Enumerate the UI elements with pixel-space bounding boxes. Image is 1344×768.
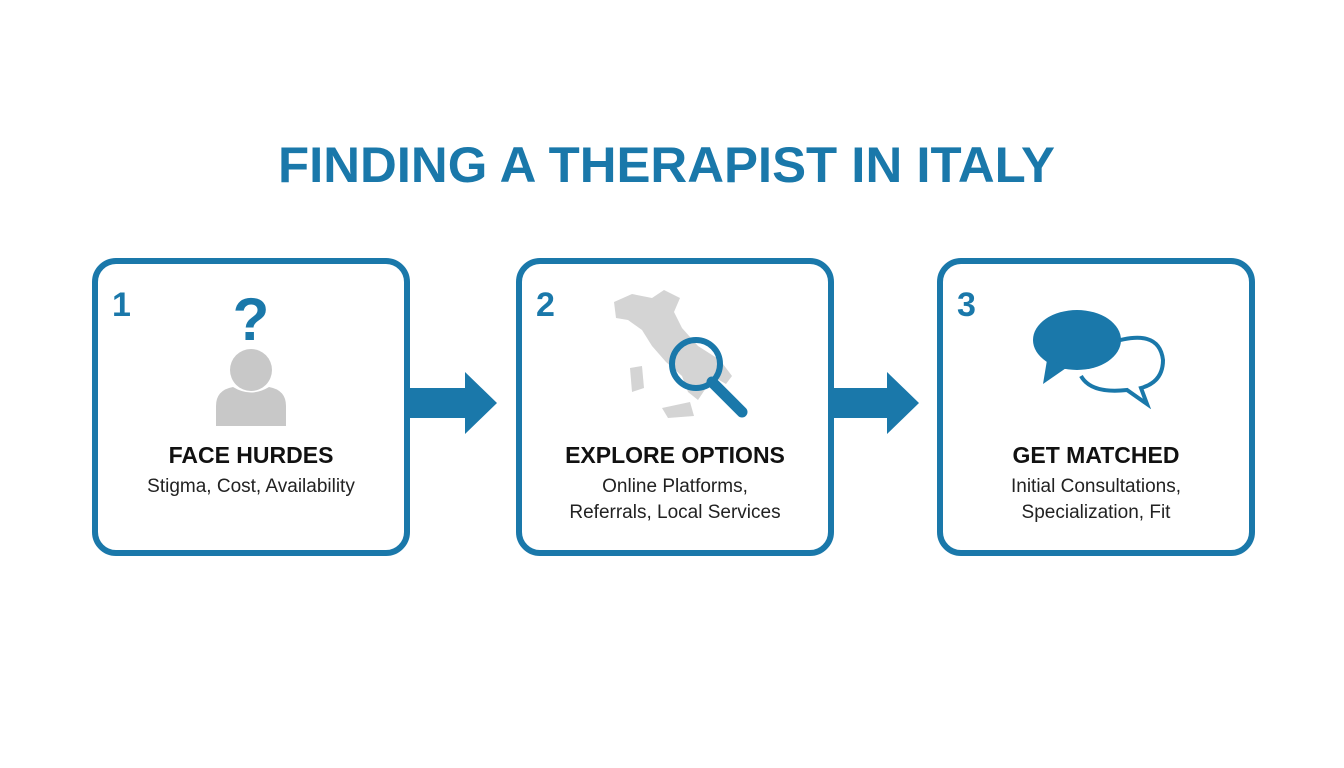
description: Specialization, Fit	[1022, 502, 1170, 523]
heading: GET MATCHED	[1013, 442, 1179, 468]
arrow 2	[834, 372, 919, 434]
panel: step 2	[516, 258, 834, 556]
heading: EXPLORE OPTIONS	[565, 442, 785, 468]
step number 3: 3	[957, 286, 976, 324]
panel: step 1	[92, 258, 410, 556]
description: Referrals, Local Services	[569, 502, 781, 523]
heading: FACE HURDES	[169, 442, 333, 468]
icon: speech bubbles	[1033, 310, 1165, 409]
description: Initial Consultations,	[1011, 476, 1181, 497]
icon: person with question mark	[216, 286, 286, 426]
step number 2: 2	[536, 286, 555, 324]
description	[569, 476, 781, 523]
arrow 1	[410, 372, 497, 434]
description: Stigma, Cost, Availability	[147, 476, 355, 497]
panel: step 3	[937, 258, 1255, 556]
description: Online Platforms,	[602, 476, 748, 497]
icon: person with question mark: ?	[233, 286, 269, 353]
step number 1: 1	[112, 286, 131, 324]
description	[1011, 476, 1181, 523]
icon: Italy map with magnifier	[614, 290, 748, 418]
title: FINDING A THERAPIST IN ITALY	[278, 137, 1055, 193]
